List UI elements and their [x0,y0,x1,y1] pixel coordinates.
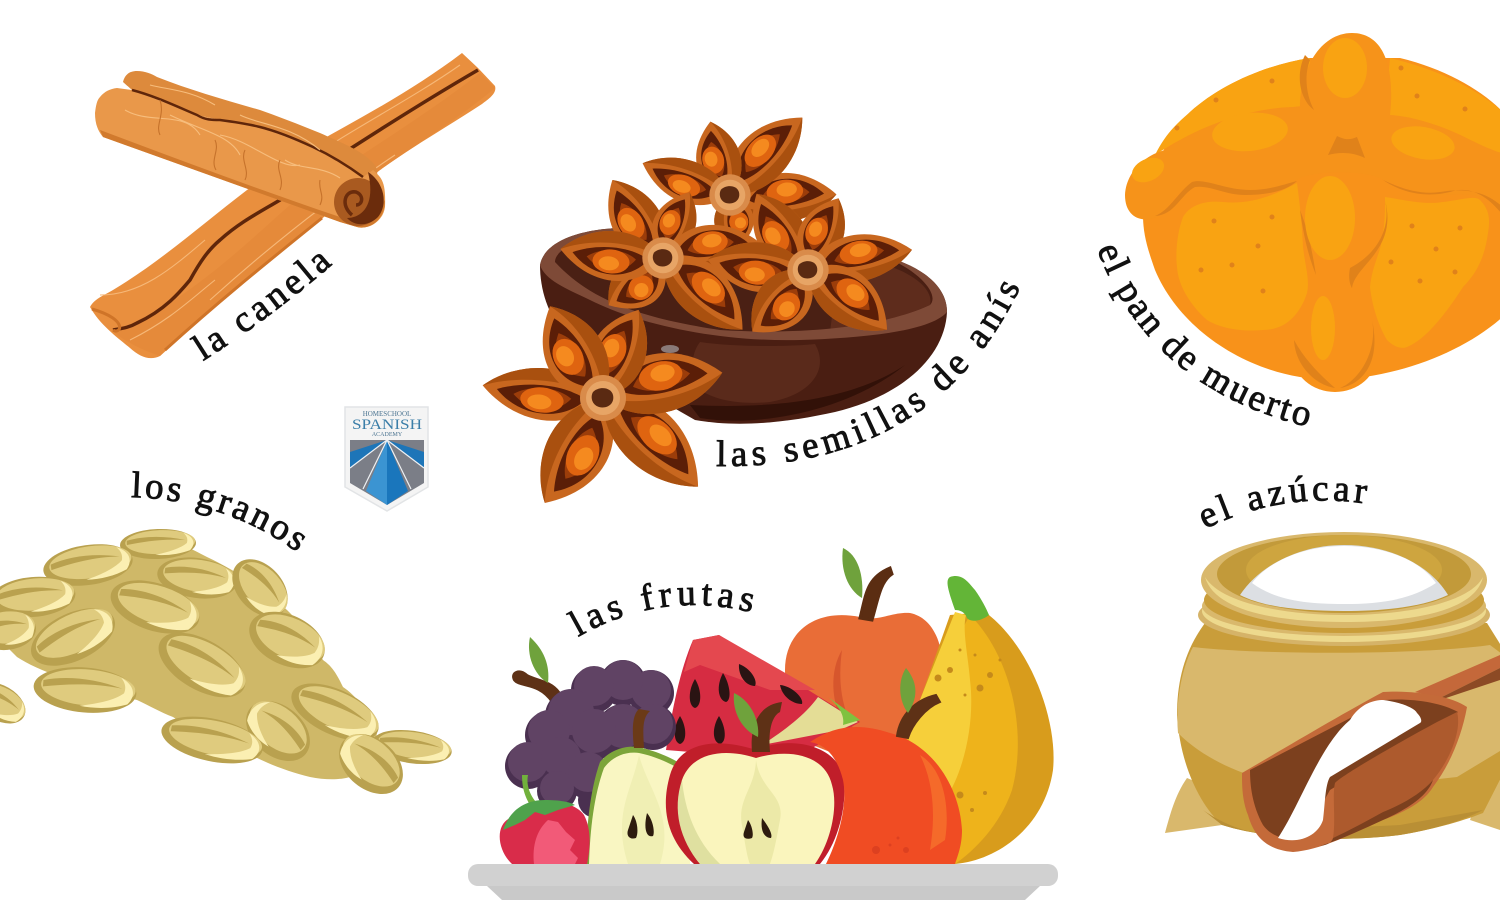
bread speckles [1174,66,1468,294]
grain: lower centre [234,689,322,773]
logo: Homeschool Spanish Academy shield: HOMESCHOOL [363,410,411,418]
illustration: cinnamon sticks [90,53,495,358]
grain: centre [104,570,206,644]
watermelon [666,635,860,760]
label: el pan de muerto: el pan de muerto [1098,246,1310,426]
sack neck [1198,532,1490,646]
star anise: right [705,181,916,351]
illustration: star anise bowl [480,99,947,519]
orange apple [810,668,962,864]
grain: bottom [157,709,267,771]
sack ears [1165,770,1500,833]
label: las frutas: las frutas [566,582,754,638]
sack body [1177,623,1500,839]
bread cross [1125,33,1500,392]
illustration: pan de muerto [1125,33,1500,392]
bread lobes [1155,58,1500,348]
grain: lower left [32,663,138,717]
illustration: fruit plate [468,548,1058,900]
grain: left middle [22,596,124,678]
grain: upper left [41,539,135,591]
bread body [1143,58,1500,380]
pile base [0,543,377,779]
grain: left small [0,674,33,732]
banana [890,576,1054,864]
label: los granos: los granos [131,470,306,550]
sack light area [1177,645,1500,790]
star anise: front [480,293,728,519]
peach [785,548,942,780]
grain: lower right [283,672,387,752]
label: el azúcar: el azúcar [1201,475,1368,527]
grain: right [240,600,334,680]
star anise: left [558,168,763,347]
label: la canela: la canela [189,254,333,362]
logo: Homeschool Spanish Academy shield [345,407,428,511]
grain: edge [0,607,38,653]
strawberry [500,775,590,864]
grain: upper right [221,548,299,628]
plate [468,864,1058,900]
grain: upper middle [155,553,239,603]
apple half [666,693,844,864]
scoop [1242,655,1500,852]
label: las semillas de anís: las semillas de anís [716,281,1019,467]
grain: tip [327,722,415,806]
grain: far left [0,573,77,621]
star anise: top [635,99,819,251]
grain: top [119,528,197,560]
illustration: sugar sack with scoop [1165,532,1500,852]
pear half [586,709,690,864]
grapes [505,637,676,818]
star anise: back pod [732,167,839,227]
grain: far right [370,725,454,769]
bowl [540,228,947,424]
front cinnamon stick [95,71,385,228]
sack bottom shade [1203,810,1483,839]
back cinnamon stick [90,53,495,358]
illustration: grains pile [0,528,454,806]
grain: long centre [148,619,256,711]
logo: Homeschool Spanish Academy shield: ACADEMY [372,432,403,438]
logo: Homeschool Spanish Academy shield: SPANISH [352,417,422,433]
